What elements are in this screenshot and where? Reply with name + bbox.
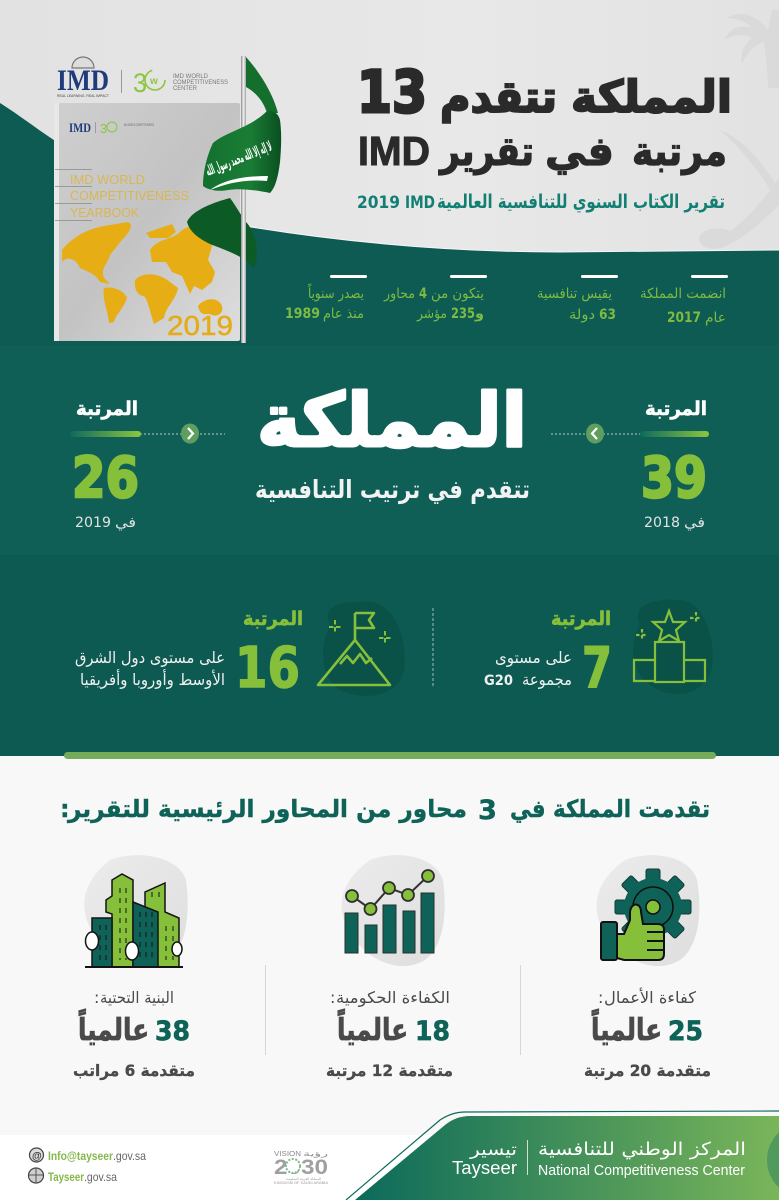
contact links: @ — [32, 1151, 42, 1162]
government efficiency text — [326, 988, 453, 1080]
footer white strip — [0, 1135, 779, 1200]
stat: since 1989: يصدر سنوياً — [308, 283, 364, 302]
footer banner — [346, 1111, 779, 1200]
business efficiency text: متقدمة 20 مرتبة — [584, 1061, 711, 1080]
government efficiency text: : — [330, 988, 335, 1007]
icon: mountain and flag — [318, 602, 405, 696]
infrastructure text: 38 — [155, 1016, 190, 1047]
stat: joined 2017: 2017 — [667, 310, 701, 326]
contact links — [28, 1148, 146, 1184]
header background — [0, 0, 779, 346]
footer banner: Tayseer — [452, 1158, 517, 1178]
stat: 4 pillars, 235 indicators: و — [474, 306, 484, 322]
contact links: Tayseer — [48, 1170, 84, 1184]
IMD logos — [57, 57, 229, 98]
icon: gear and thumb — [596, 855, 699, 966]
flag sword — [210, 176, 268, 190]
IMD logos: w — [149, 76, 158, 87]
rank 16 MENA: 16 — [235, 636, 300, 701]
stat: 4 pillars, 235 indicators: يتكون من — [431, 286, 484, 302]
book small logo: IMD WORLD COMPETITIVENESS — [124, 123, 154, 127]
government efficiency text: عالمياً — [337, 1008, 408, 1048]
icon: bar chart with line — [341, 855, 445, 966]
section heading — [60, 795, 710, 826]
IMD logos: IMD — [57, 64, 109, 97]
light panel — [0, 756, 779, 1136]
center dashed divider — [432, 608, 434, 686]
section heading: محاور من المحاور الرئيسية للتقرير — [67, 795, 467, 823]
stat: joined 2017: عام — [705, 310, 726, 326]
green divider bar — [64, 752, 716, 759]
rank 7 G20 — [484, 608, 612, 701]
kingdom heading: المملكة — [257, 378, 527, 464]
rank 2019 — [70, 398, 225, 531]
title: مرتبة — [632, 129, 727, 175]
icon: podium and star — [633, 600, 713, 694]
title — [357, 58, 732, 175]
green wave background — [0, 103, 779, 346]
stat: since 1989: 1989 — [285, 306, 320, 322]
rank 16 MENA — [75, 608, 303, 701]
vision 2030 logo: VISION — [274, 1151, 301, 1158]
government efficiency text: الكفاءة الحكومية — [336, 988, 450, 1008]
stat: since 1989: منذ عام — [323, 306, 364, 322]
rank 7 G20: 7 — [582, 636, 612, 701]
stat: 63 countries: يقيس تنافسية — [537, 286, 612, 302]
rank 7 G20: المرتبة — [551, 608, 611, 630]
book title: IMD WORLD — [70, 172, 145, 187]
book small logo: IMD — [69, 120, 91, 135]
stat: 63 countries: دولة — [569, 307, 595, 323]
IMD logos: IMD WORLD — [173, 73, 208, 80]
rank 16 MENA: الأوسط وأوروبا وأفريقيا — [80, 669, 225, 690]
lower green panel — [0, 555, 779, 756]
divider — [520, 965, 522, 1055]
stat: 4 pillars, 235 indicators: 4 — [419, 286, 427, 302]
business efficiency text: 25 — [668, 1016, 703, 1047]
thumb — [617, 904, 664, 960]
cuff — [601, 922, 617, 960]
divider — [264, 965, 266, 1055]
title: 13 — [357, 58, 427, 126]
rank 2018 — [551, 398, 709, 531]
rank 2018: 39 — [641, 446, 707, 511]
vision 2030 logo: المملكة العربية السعودية — [286, 1177, 321, 1181]
center name english: National Competitiveness Center — [538, 1162, 745, 1179]
business efficiency text: عالمياً — [591, 1008, 662, 1048]
stat: 63 countries — [537, 275, 618, 323]
IMD logos: COMPETITIVENESS — [173, 79, 229, 86]
section heading: : — [60, 795, 70, 823]
business efficiency text: : — [598, 988, 603, 1007]
infrastructure text — [73, 988, 195, 1080]
vision 2030 logo: 2030 — [274, 1156, 328, 1179]
book title: YEARBOOK — [70, 205, 139, 220]
title: في — [545, 129, 614, 175]
vision 2030 logo: KINGDOM OF SAUDI ARABIA — [274, 1181, 329, 1185]
rank 16 MENA: على مستوى دول الشرق — [75, 648, 225, 668]
government efficiency text: 18 — [415, 1016, 450, 1047]
stat: since 1989 — [285, 275, 367, 322]
icon: city buildings — [84, 855, 188, 967]
government efficiency text: متقدمة 12 مرتبة — [326, 1061, 453, 1080]
center name arabic: المركز الوطني للتنافسية — [538, 1139, 746, 1160]
rank 2018: المرتبة — [645, 398, 707, 420]
IMD logos: 3 — [133, 68, 147, 98]
title: تقرير — [438, 129, 534, 175]
book year: 2019 — [167, 310, 233, 341]
flag and pole — [187, 56, 281, 343]
stat: 4 pillars, 235 indicators: 235 — [451, 306, 475, 322]
section heading: تقدمت المملكة في — [510, 795, 710, 823]
vision 2030 logo: رؤية — [303, 1150, 328, 1158]
stat: 4 pillars, 235 indicators: محاور — [383, 286, 415, 302]
rank 16 MENA: المرتبة — [243, 608, 303, 630]
palm and swords emblem — [699, 10, 779, 249]
vision 2030 logo — [274, 1150, 329, 1185]
stat: joined 2017 — [640, 275, 728, 326]
infrastructure text: عالمياً — [78, 1008, 149, 1048]
yearbook cover — [54, 103, 240, 341]
rank 7 G20: على مستوى — [495, 648, 572, 668]
rank 7 G20: G20 — [484, 673, 513, 689]
stat: joined 2017: انضمت المملكة — [640, 286, 726, 302]
infrastructure text: البنية التحتية — [100, 988, 174, 1007]
title: IMD — [358, 128, 430, 174]
book title: COMPETITIVENESS — [70, 188, 189, 203]
rank 2019: 2019 — [75, 515, 111, 531]
contact links: .gov.sa — [113, 1149, 146, 1163]
stat: 4 pillars, 235 indicators: مؤشر — [416, 306, 447, 322]
kingdom subheading: تتقدم في ترتيب التنافسية — [255, 475, 530, 505]
infrastructure text: : — [94, 988, 99, 1007]
section heading: 3 — [478, 795, 497, 826]
infrastructure text: متقدمة 6 مراتب — [73, 1061, 195, 1080]
world map — [62, 222, 222, 324]
contact links: .gov.sa — [84, 1170, 117, 1184]
title: تتقدم — [440, 72, 557, 123]
stat: 4 pillars, 235 indicators — [383, 275, 487, 322]
subtitle: 2019 — [357, 193, 400, 213]
rank 2018: في — [684, 515, 705, 531]
IMD logos: CENTER — [173, 85, 197, 92]
IMD logos: REAL LEARNING. REAL IMPACT — [57, 93, 109, 98]
gear — [615, 869, 691, 945]
text: لا إله إلا الله محمد رسول الله — [204, 139, 274, 180]
rank 2019: 26 — [72, 446, 139, 511]
book title — [55, 169, 189, 221]
subtitle — [357, 191, 725, 214]
rank 7 G20: مجموعة — [522, 670, 572, 690]
business efficiency text — [584, 987, 711, 1080]
book small logo — [69, 120, 154, 136]
book small logo: 3 — [100, 121, 107, 136]
business efficiency text: كفاءة الأعمال — [604, 987, 696, 1007]
rank 2019: المرتبة — [76, 398, 138, 420]
stat: 63 countries: 63 — [599, 307, 616, 323]
title: المملكة — [571, 72, 732, 123]
contact links: Info@tayseer — [48, 1149, 113, 1163]
tayseer wordmark: تيسير — [469, 1140, 517, 1160]
subtitle: IMD — [405, 193, 435, 213]
rank 2019: في — [115, 515, 136, 531]
rank 2018: 2018 — [644, 515, 680, 531]
main green panel: ranking — [0, 345, 779, 555]
